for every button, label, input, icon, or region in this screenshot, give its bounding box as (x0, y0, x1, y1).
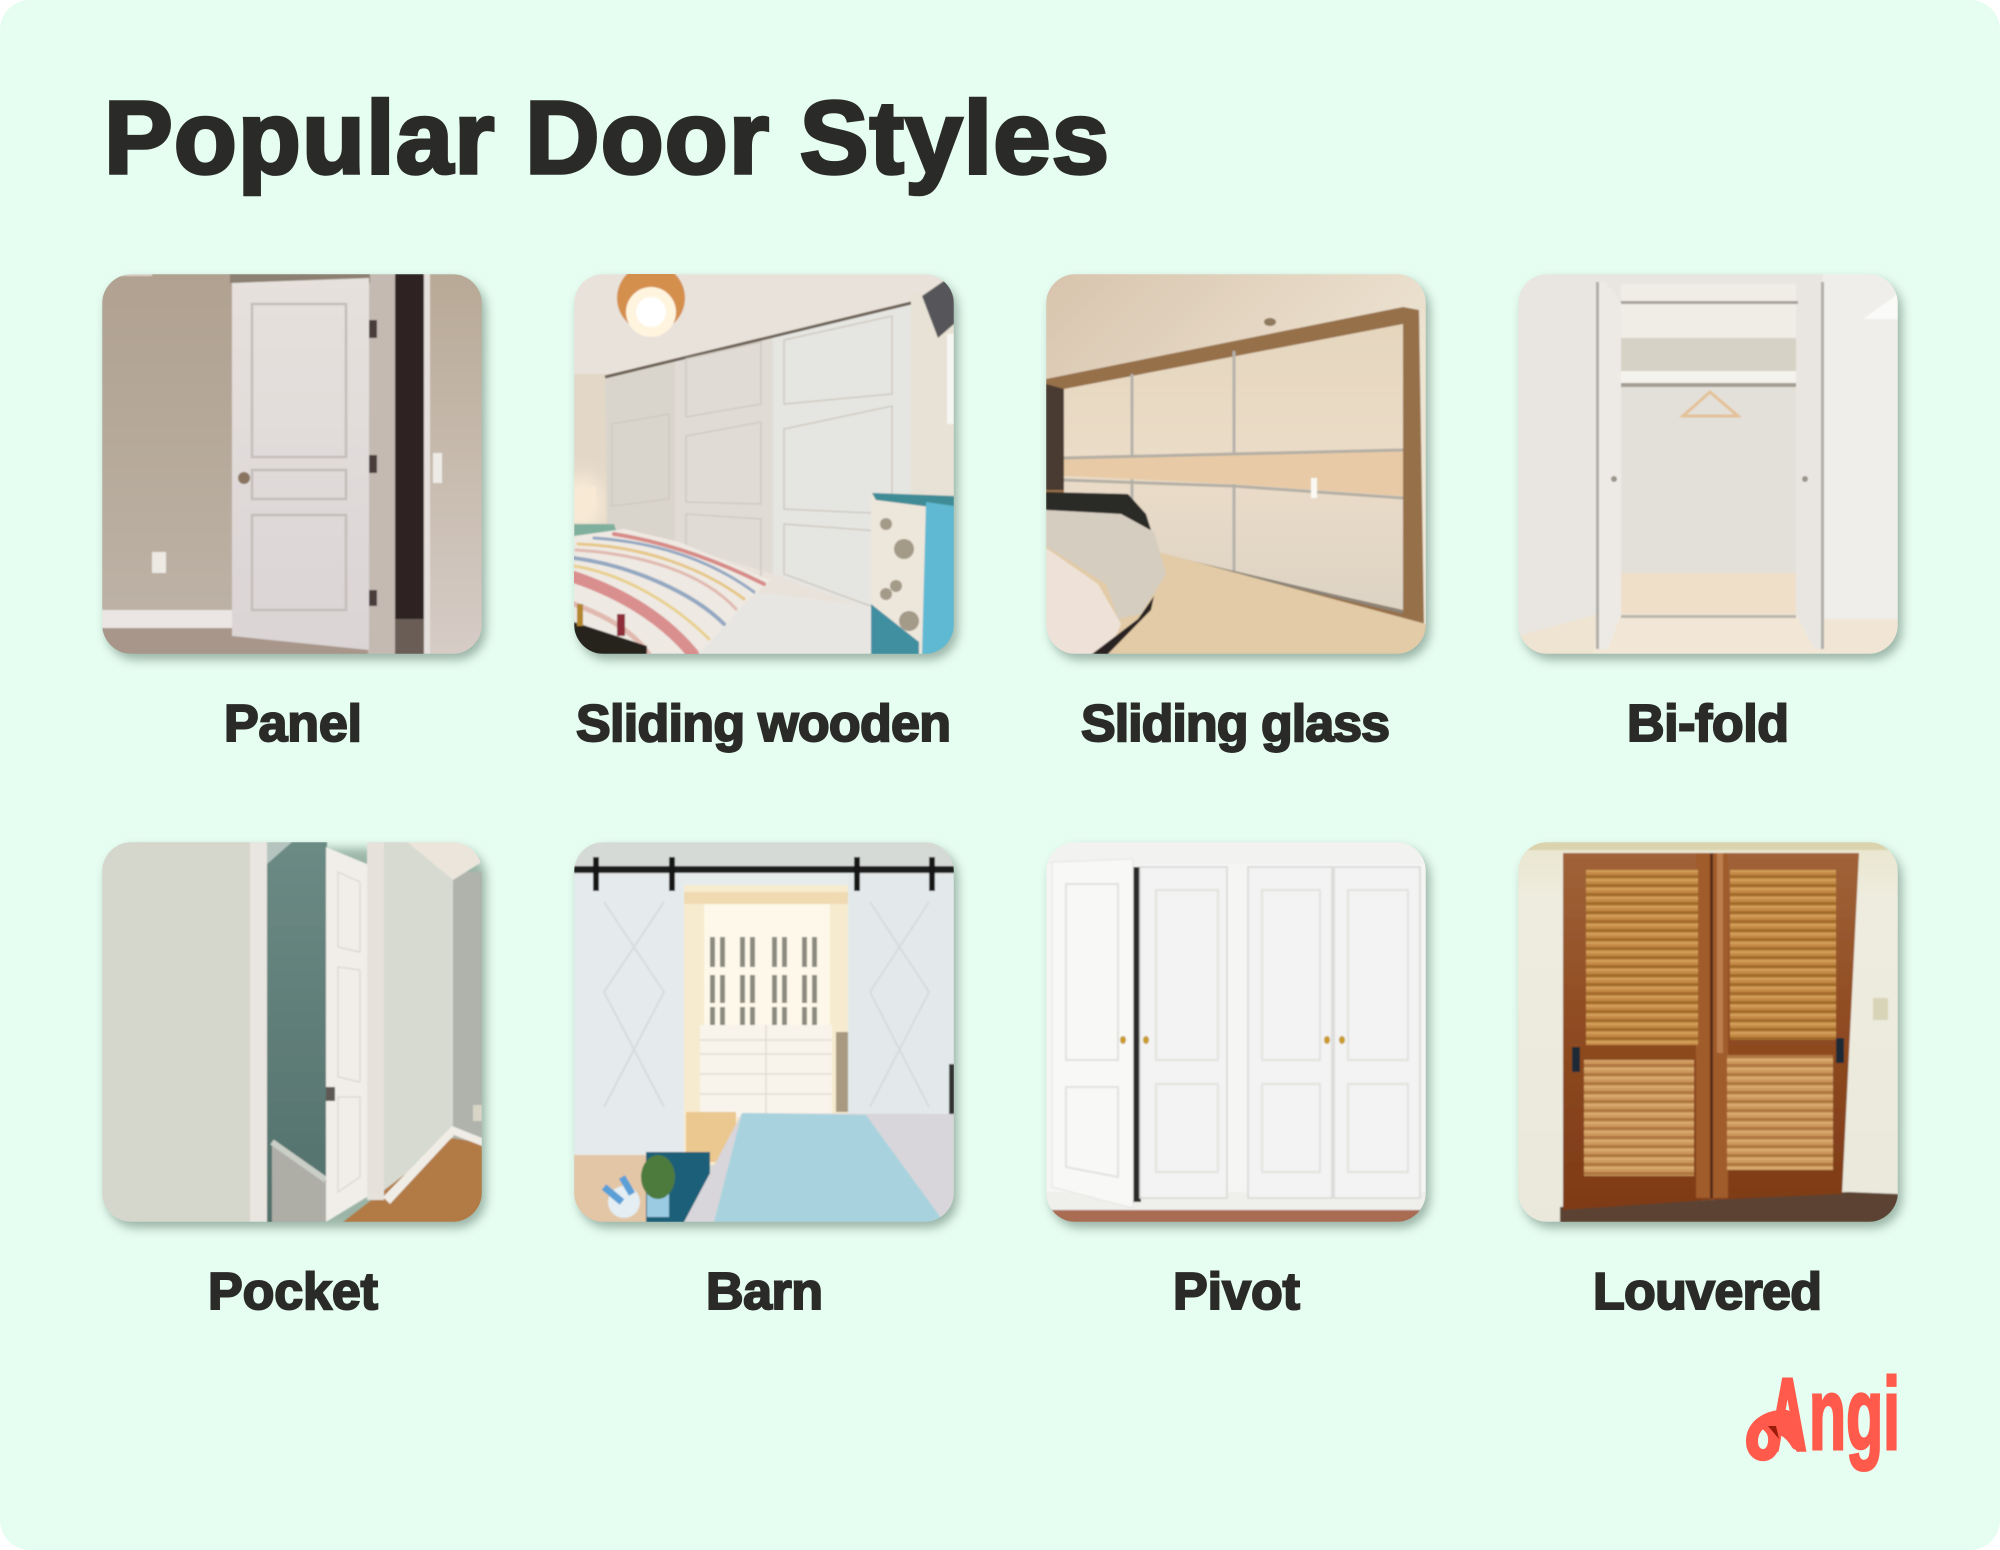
panel: louvered door (1518, 842, 1902, 1228)
panel: bi-fold door (1518, 274, 1902, 660)
label: Louvered: Louvered (1593, 1263, 1822, 1321)
label: Barn: Barn (706, 1263, 823, 1321)
panel: sliding wooden door (560, 264, 958, 660)
logo: Angi (1752, 1357, 1900, 1471)
label: Panel: Panel (224, 695, 362, 753)
title: Popular Door Styles (104, 80, 1109, 195)
label: Sliding glass: Sliding glass (1081, 695, 1390, 753)
logo: Angi: ngi (1809, 1357, 1900, 1471)
label: Bi-fold: Bi-fold (1627, 695, 1789, 753)
label: Pocket: Pocket (208, 1263, 378, 1321)
logo: Angi: A (1769, 1359, 1806, 1471)
panel: sliding glass door (1046, 274, 1430, 660)
panel: pivot door (1046, 842, 1430, 1228)
label: Pivot: Pivot (1173, 1263, 1300, 1321)
label: Sliding wooden: Sliding wooden (576, 695, 951, 753)
panel: panel door (102, 274, 486, 660)
panel: pocket door (102, 842, 486, 1228)
panel: barn door (574, 842, 958, 1228)
